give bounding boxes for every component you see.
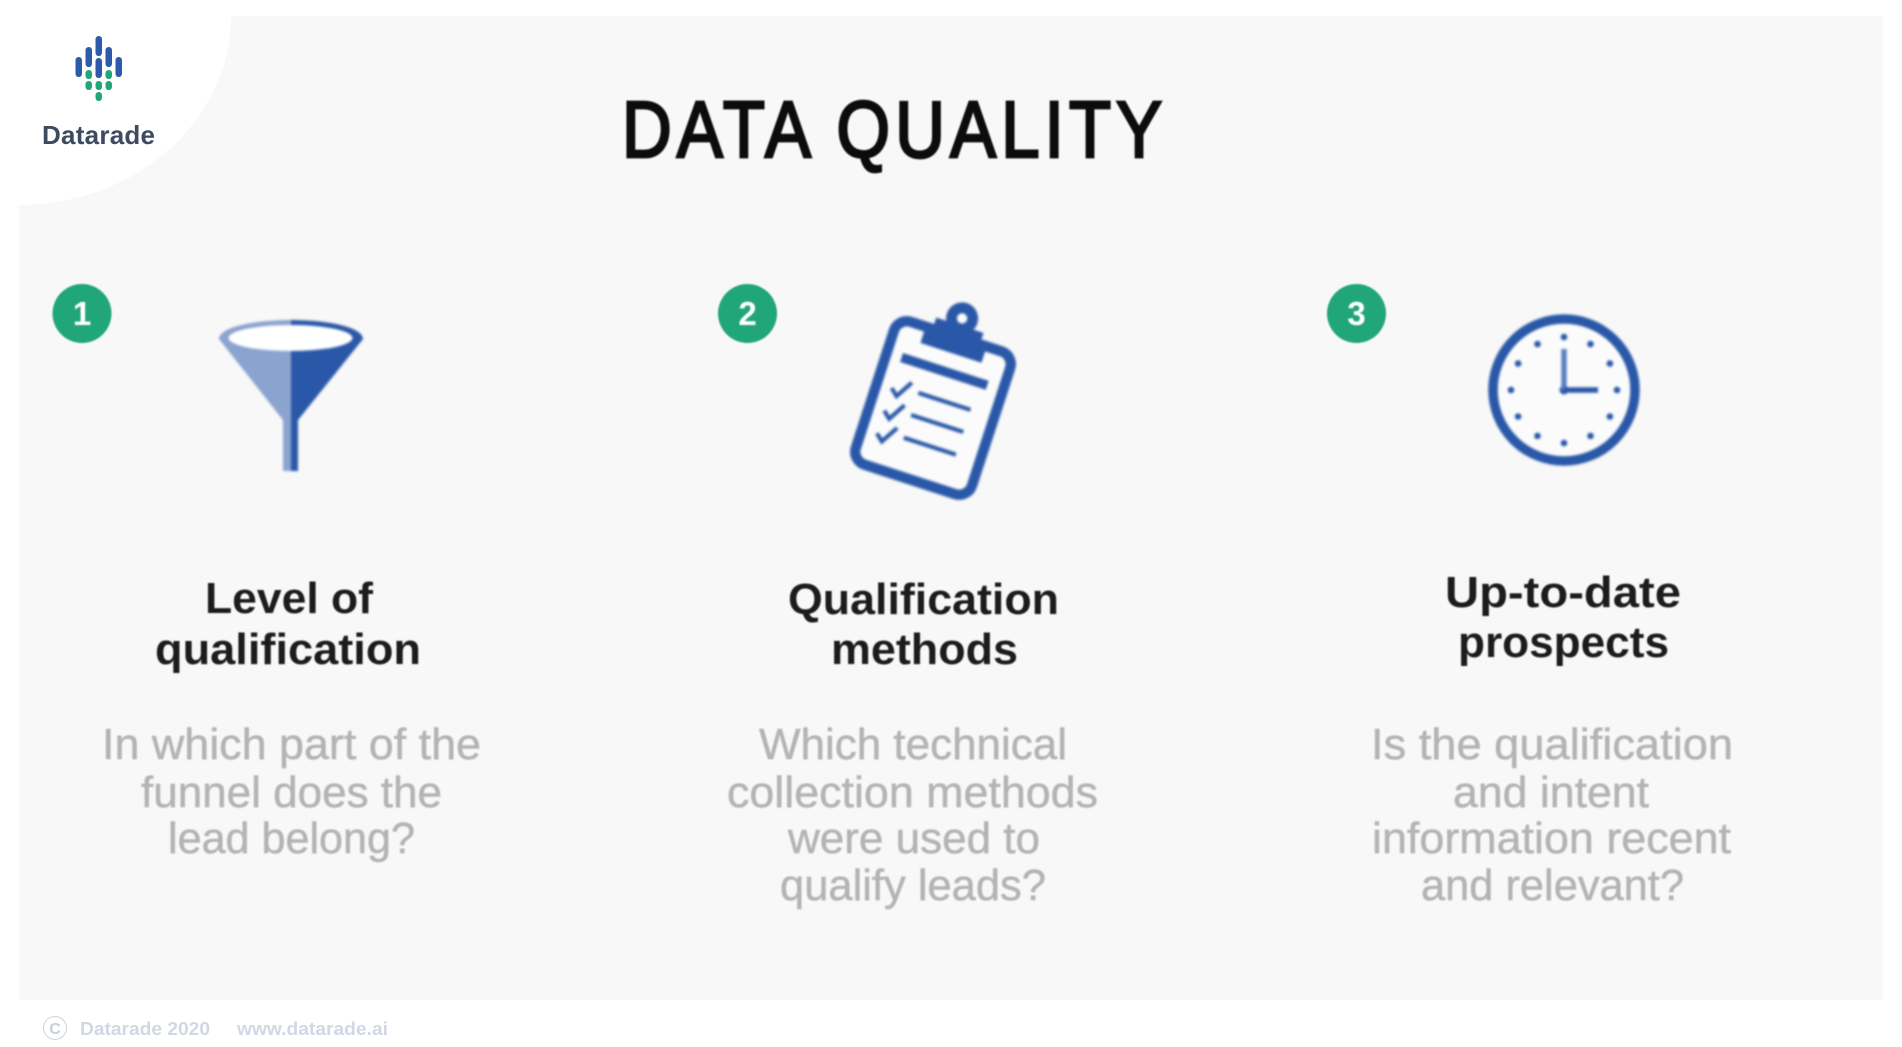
website: www.datarade.ai xyxy=(236,1019,388,1039)
icon: copyright: C xyxy=(49,1021,61,1038)
number badge 2 xyxy=(718,284,777,343)
number badge 2: 2 xyxy=(738,295,757,332)
description: Which technical xyxy=(759,720,1067,769)
heading xyxy=(155,574,421,674)
heading: Up-to-date xyxy=(1445,568,1681,617)
icon: funnel xyxy=(219,320,363,471)
icon: clipboard xyxy=(852,284,1025,498)
column 1: level of qualification xyxy=(52,284,481,863)
icon: copyright xyxy=(44,1016,66,1040)
description: and intent xyxy=(1453,768,1649,817)
logo corner cutout xyxy=(0,0,231,205)
column 2: qualification methods xyxy=(718,284,1098,910)
description: qualify leads? xyxy=(780,861,1046,910)
description: funnel does the xyxy=(141,768,442,817)
footer xyxy=(44,1016,388,1040)
description xyxy=(727,720,1098,910)
heading: prospects xyxy=(1458,618,1669,667)
heading xyxy=(788,575,1059,674)
number badge 3: 3 xyxy=(1347,295,1366,332)
logo mark xyxy=(76,36,122,101)
heading: methods xyxy=(831,625,1018,674)
number badge 1: 1 xyxy=(73,295,91,332)
description: information recent xyxy=(1372,814,1731,863)
number badge 3 xyxy=(1327,284,1386,343)
icon: clock xyxy=(1493,319,1635,461)
description: and relevant? xyxy=(1421,861,1684,910)
description xyxy=(102,720,481,863)
heading: Level of xyxy=(205,574,373,623)
number badge 1 xyxy=(52,284,112,343)
Datarade logo xyxy=(42,36,155,150)
logo wordmark: Datarade xyxy=(42,120,155,150)
title: DATA QUALITY xyxy=(622,84,1162,174)
description: were used to xyxy=(787,814,1040,863)
description: In which part of the xyxy=(102,720,481,769)
heading: Qualification xyxy=(788,575,1059,624)
description: collection methods xyxy=(727,768,1098,817)
description: lead belong? xyxy=(168,814,415,863)
description xyxy=(1371,720,1733,910)
description: Is the qualification xyxy=(1371,720,1733,769)
column 3: up-to-date prospects xyxy=(1327,284,1733,910)
heading: qualification xyxy=(155,625,421,674)
heading xyxy=(1445,568,1681,667)
copyright text: Datarade 2020 xyxy=(80,1019,210,1039)
